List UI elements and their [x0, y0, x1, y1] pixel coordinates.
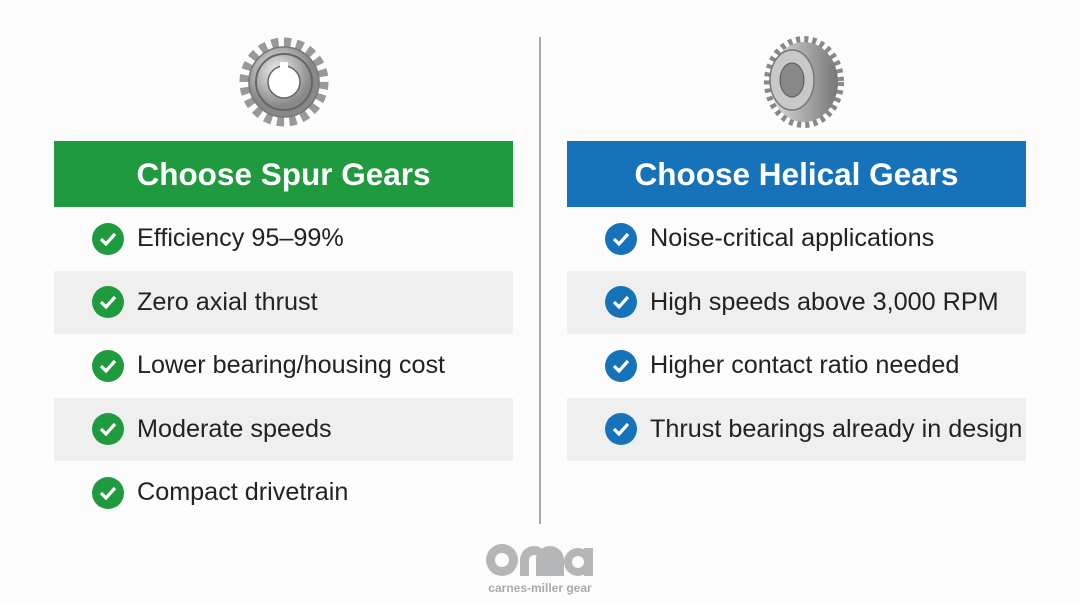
panel: spur gears [54, 141, 513, 509]
item: moderate speeds: Moderate speeds [137, 415, 332, 443]
heading: choose spur gears: Choose Spur Gears [136, 156, 431, 192]
item: thrust bearings [567, 398, 1026, 461]
item: thrust bearings: Thrust bearings already in design [650, 415, 1022, 443]
logo: carnes-miller gear [486, 544, 593, 595]
heading: choose helical gears: Choose Helical Gears [635, 156, 958, 192]
icon: spur gear [240, 38, 328, 126]
logo: carnes-miller gear: carnes-miller gear [488, 581, 592, 595]
item: efficiency: Efficiency 95–99% [137, 224, 344, 252]
item: zero axial thrust [54, 270, 513, 334]
divider [539, 37, 541, 524]
item: noise-critical: Noise-critical applications [650, 224, 934, 252]
heading: choose spur gears [54, 141, 513, 207]
heading: choose helical gears [567, 141, 1026, 207]
icon: helical gear [764, 36, 844, 128]
panel: helical gears [567, 141, 1026, 461]
item: contact ratio: Higher contact ratio needed [650, 351, 959, 379]
item: compact drivetrain: Compact drivetrain [137, 478, 348, 506]
item: high speeds [567, 270, 1026, 334]
item: lower cost: Lower bearing/housing cost [137, 351, 445, 379]
item: moderate speeds [54, 398, 513, 461]
item: high speeds: High speeds above 3,000 RPM [650, 288, 999, 316]
item: zero axial thrust: Zero axial thrust [137, 288, 318, 316]
